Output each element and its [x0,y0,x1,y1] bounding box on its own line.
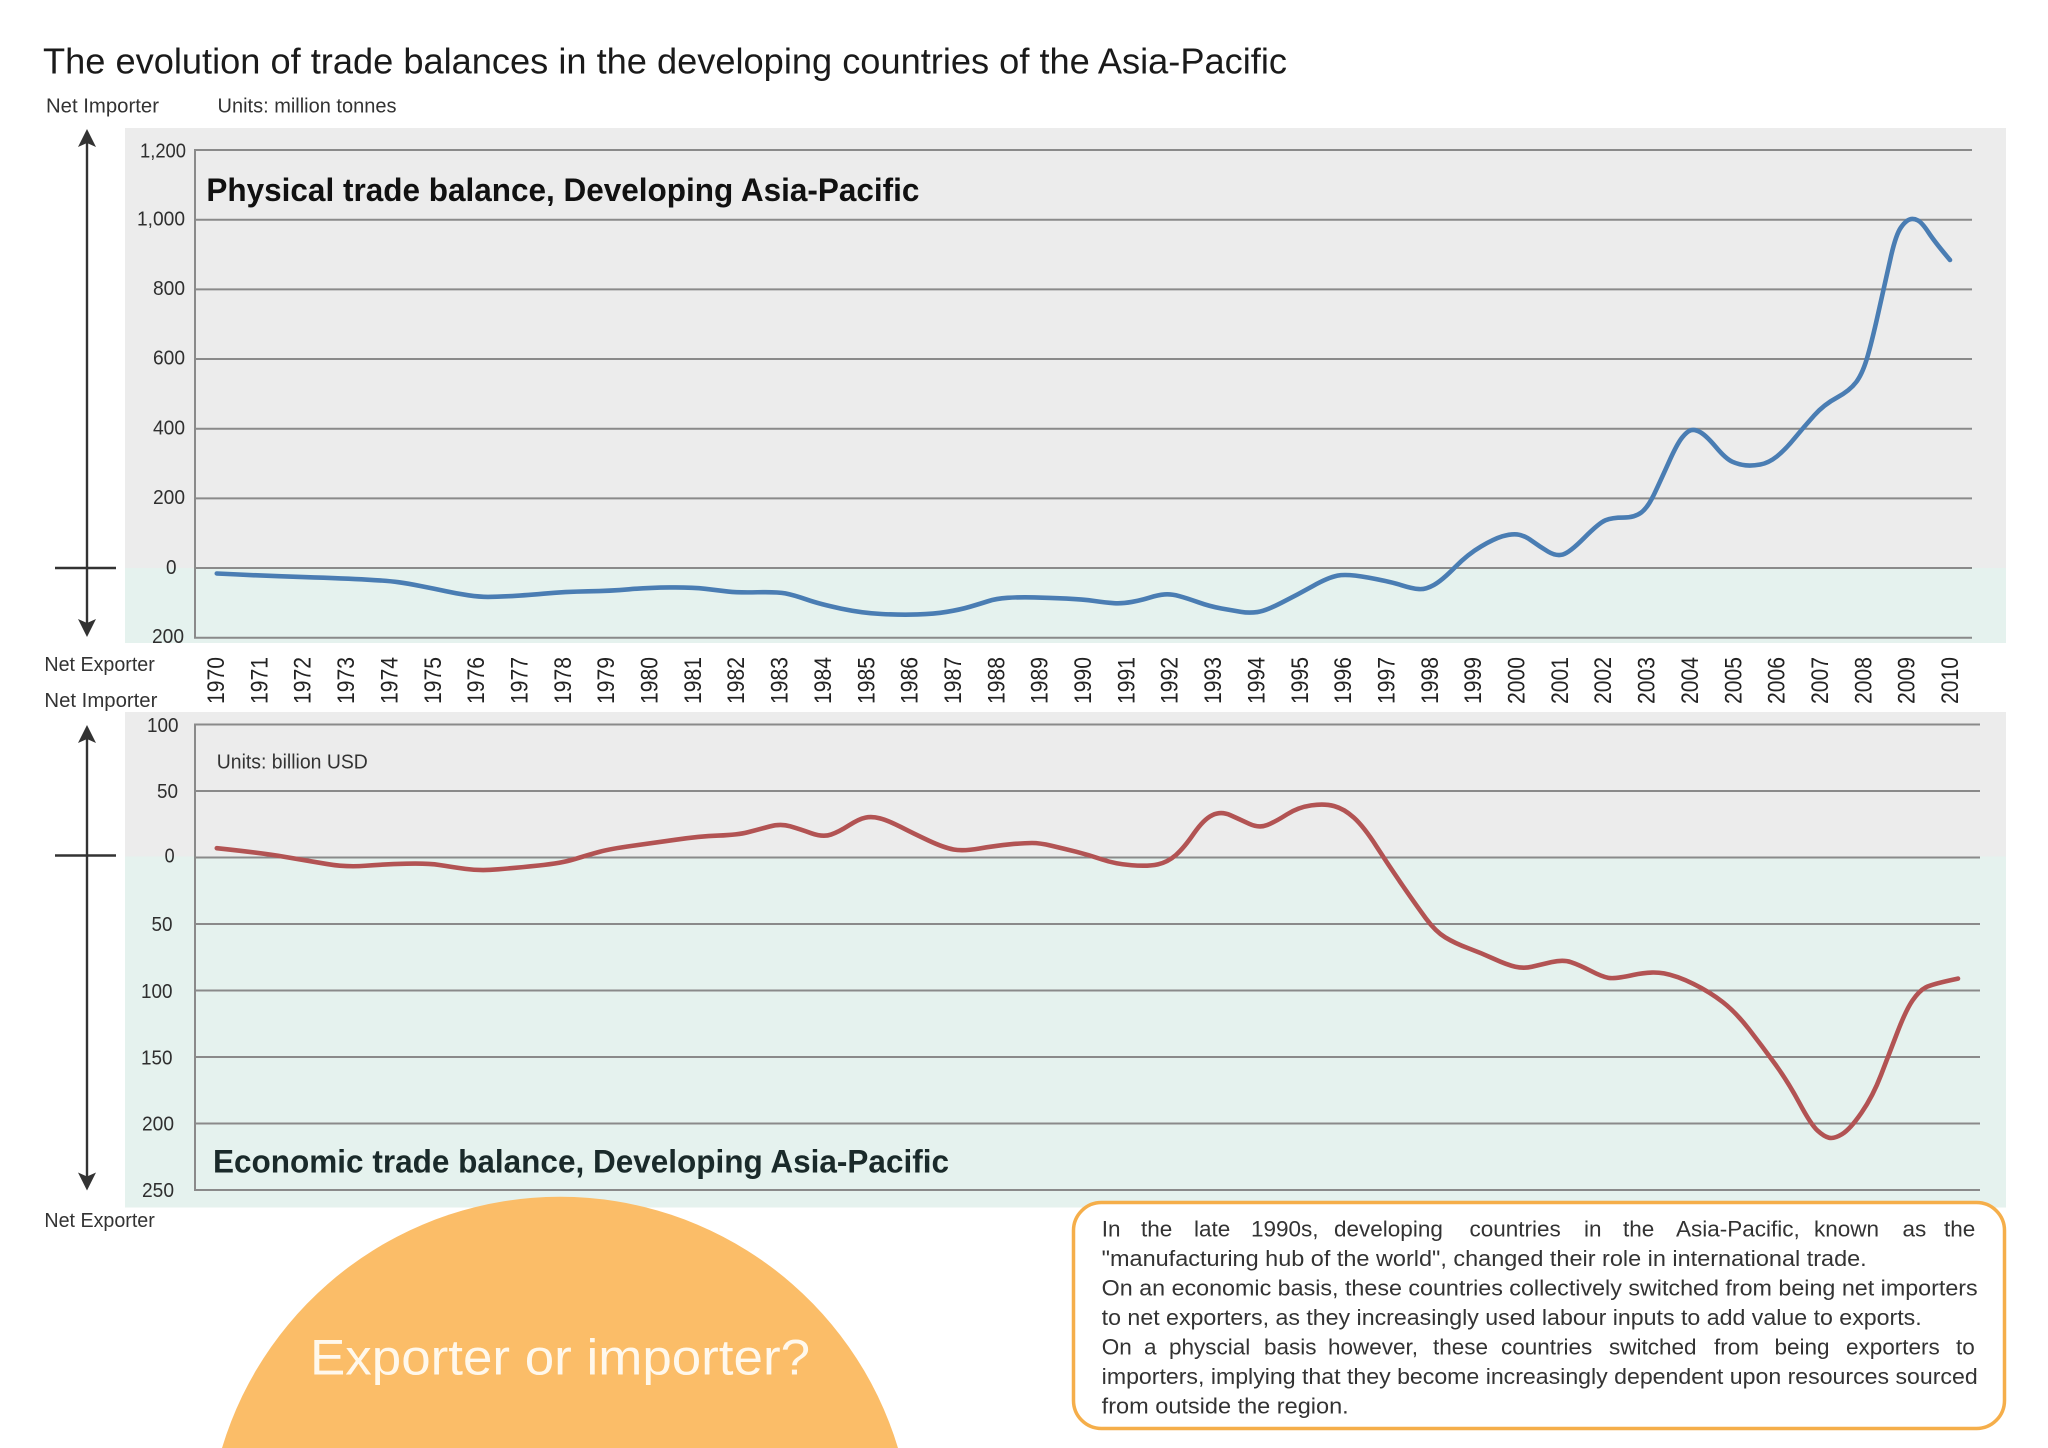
label: net importer bottom chart: Net Importer [44,690,158,712]
x axis year labels: 1983 [767,657,794,704]
x axis year labels: 1989 [1027,657,1054,704]
text line 2: "manufacturing hub of the world", changed their role in international trade. [1102,1246,1867,1271]
text line 5: On [1102,1335,1138,1360]
label: net importer top: Net Importer [46,96,159,118]
text line 1: countries [1470,1217,1567,1242]
line: economic trade balance [217,805,1958,1138]
text line 6: importers, implying that they become increasingly dependent upon resources sourced [1102,1364,1978,1389]
x axis year labels: 2000 [1504,657,1530,704]
text line 5: exporters [1846,1335,1946,1360]
text line 5: a [1144,1335,1163,1360]
x axis year labels: 2003 [1634,657,1661,704]
title: The evolution of trade balances in the developing countries of the Asia-Pacific [43,40,1287,82]
panel heading: physical: Physical trade balance, Developing Asia-Pacific [206,172,919,208]
y axis labels: physical: 200 [153,487,185,509]
x axis year labels: 1979 [593,657,620,704]
label: net exporter bottom chart: Net Exporter [44,1210,155,1232]
text line 5: being [1774,1335,1836,1360]
callout: orange circle with question [222,1197,898,1448]
text line 5: basis [1264,1335,1323,1360]
panel: physical trade balance chart [125,128,2006,648]
x axis year labels: 1981 [680,657,707,704]
text line 5: however, [1328,1335,1424,1360]
x axis year labels: 2001 [1547,657,1574,704]
y axis labels: economic: 50 [157,781,178,803]
x axis year labels: 2010 [1937,657,1964,704]
text line 5: from [1714,1335,1765,1360]
text line 4: to net exporters, as they increasingly used labour inputs to add value to exports. [1102,1305,1922,1330]
y axis labels: economic: 50 [152,914,172,936]
x axis year labels: 2005 [1720,657,1747,704]
y axis labels: physical: 1,200 [140,140,186,162]
text line 1: 1990s, [1251,1217,1325,1242]
x axis year labels: 1998 [1417,657,1444,704]
x axis year labels: 1980 [636,657,664,704]
x axis year labels: 1985 [853,657,880,704]
text line 5: to [1956,1335,1975,1360]
text line 1: late [1194,1217,1237,1242]
x axis year labels: 1982 [723,657,750,704]
x axis year labels [203,657,1964,704]
x axis year labels: 1995 [1287,657,1314,704]
circle text: Exporter or importer? [310,1330,810,1386]
x axis year labels: 2002 [1590,657,1617,704]
x axis year labels: 1992 [1157,657,1184,704]
y axis labels: physical: 400 [153,417,185,439]
x axis year labels: 2004 [1677,657,1704,704]
y axis labels: physical: 200 [152,626,184,648]
x axis year labels: 1997 [1373,657,1400,704]
text line 5: countries [1501,1335,1599,1360]
text line 1: the [1623,1217,1661,1242]
x axis year labels: 1976 [463,657,490,704]
x axis year labels: 1977 [506,657,533,704]
x axis year labels: 1990 [1070,657,1097,704]
line: physical trade balance [217,219,1950,615]
y axis labels: economic: 100 [147,715,178,737]
text line 7: from outside the region. [1102,1394,1349,1419]
text line 1: the [1141,1217,1179,1242]
x axis year labels: 1994 [1243,657,1270,704]
arrow: economic importer/exporter axis [55,725,116,1190]
label: units million tonnes: Units: million tonnes [218,96,396,118]
callout: explanatory text box [1074,1202,2004,1428]
x axis year labels: 2008 [1850,657,1877,704]
text line 1: the [1944,1217,1975,1242]
x axis year labels: 1984 [810,657,837,704]
x axis year labels: 1996 [1330,657,1357,704]
x axis year labels: 1970 [203,657,230,704]
y axis labels: physical [137,140,186,648]
text line 1: Asia-Pacific, [1676,1217,1806,1242]
x axis year labels: 1986 [897,657,924,704]
x axis year labels: 2007 [1807,657,1834,704]
x axis year labels: 1971 [246,657,273,704]
text line 1: known [1814,1217,1885,1242]
x axis year labels: 1999 [1460,657,1487,704]
text line 1: in [1584,1217,1608,1242]
x axis year labels: 2009 [1894,657,1921,704]
y axis labels: economic [141,715,178,1202]
x axis year labels: 1991 [1113,657,1140,704]
text line 1: developing [1334,1217,1449,1242]
x axis year labels: 2006 [1764,657,1791,704]
y axis labels: physical: 800 [153,278,185,300]
panel: economic trade balance chart [125,712,2006,1208]
x axis year labels: 1975 [420,657,447,704]
x axis year labels: 1972 [290,657,317,704]
label: units billion USD: Units: billion USD [217,751,368,773]
arrow: physical importer/exporter axis [55,129,116,637]
text line 5: switched [1609,1335,1703,1360]
y axis labels: economic: 100 [141,981,172,1003]
text line 5: physcial [1169,1335,1257,1360]
y axis labels: physical: 1,000 [137,208,185,230]
x axis year labels: 1974 [376,657,403,704]
text line 1: as [1902,1217,1933,1242]
x axis year labels: 1987 [940,657,967,704]
text line 5: these [1433,1335,1494,1360]
y axis labels: economic: 200 [142,1114,174,1136]
y axis labels: physical: 600 [153,348,185,370]
text line 1: In [1102,1217,1127,1242]
text line 3: On an economic basis, these countries collectively switched from being net importers [1102,1275,1978,1300]
x axis year labels: 1993 [1200,657,1227,704]
y axis labels: economic: 0 [165,846,175,868]
y axis labels: physical: 0 [166,557,176,579]
panel heading: economic: Economic trade balance, Developing Asia-Pacific [213,1144,949,1180]
y axis labels: economic: 250 [142,1180,174,1202]
x axis year labels: 1973 [333,657,360,704]
label: net exporter top chart: Net Exporter [44,654,155,676]
y axis labels: economic: 150 [141,1048,172,1070]
x axis year labels: 1988 [983,657,1010,704]
x axis year labels: 1978 [550,657,577,704]
